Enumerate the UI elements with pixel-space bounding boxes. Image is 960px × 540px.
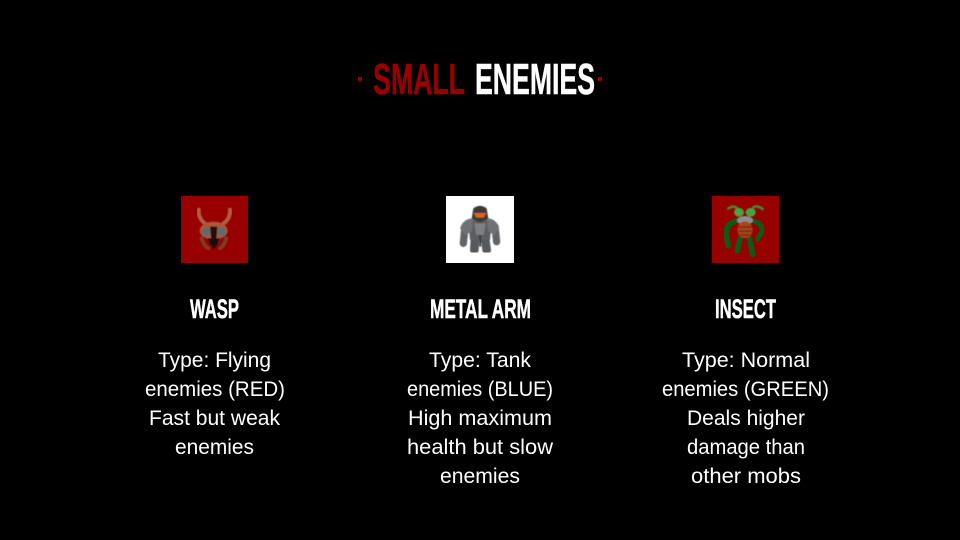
text: wasp description: enemies (RED) — [145, 378, 285, 401]
panel: insect — [662, 196, 829, 488]
text: wasp description — [145, 349, 285, 459]
text: insect description — [662, 349, 829, 488]
panel: metal arm — [407, 196, 554, 488]
icon: wasp sprite — [181, 196, 248, 263]
text: metal arm description: enemies — [440, 465, 520, 488]
icon: metal arm sprite — [446, 196, 514, 263]
heading: insect: INSECT — [715, 294, 776, 324]
title: ENEMIES — [475, 55, 595, 104]
text: insect description: damage than — [687, 436, 805, 459]
heading: wasp: WASP — [190, 294, 239, 324]
text: metal arm description — [407, 349, 554, 488]
text: insect description: enemies (GREEN) — [662, 378, 829, 401]
heading: metal arm: METAL ARM — [430, 294, 531, 324]
panel: wasp — [145, 196, 285, 459]
title: SMALL — [373, 55, 465, 104]
text: wasp description: enemies — [175, 436, 254, 459]
text: insect description: other mobs — [691, 465, 801, 488]
title — [358, 55, 602, 104]
text: metal arm description: High maximum — [408, 407, 552, 430]
text: metal arm description: health but slow — [407, 436, 554, 459]
text: wasp description: Type: Flying — [158, 349, 271, 372]
text: metal arm description: enemies (BLUE) — [407, 378, 553, 401]
text: wasp description: Fast but weak — [149, 407, 280, 430]
icon: insect sprite — [712, 196, 779, 263]
text: metal arm description: Type: Tank — [429, 349, 531, 372]
text: insect description: Deals higher — [687, 407, 805, 430]
text: insect description: Type: Normal — [682, 349, 810, 372]
